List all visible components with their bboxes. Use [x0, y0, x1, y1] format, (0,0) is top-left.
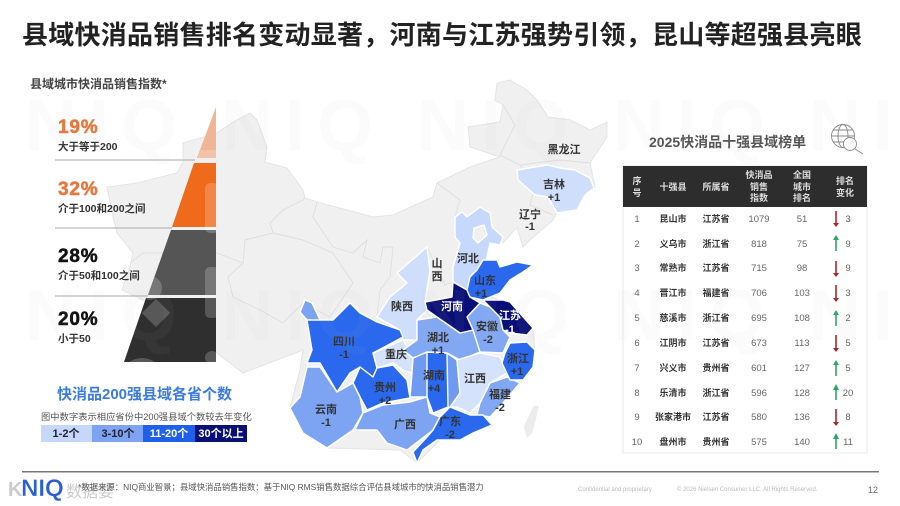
table rows: 4 — [634, 288, 640, 299]
map: province labels: -2 — [445, 429, 455, 441]
legend swatches: 30个以上 — [198, 427, 244, 440]
legend swatches: 3-10个 — [101, 427, 135, 440]
tier 20%: 小于50 — [58, 332, 91, 345]
tier 20%: 20% — [58, 309, 98, 330]
table rows: 1 — [634, 214, 640, 225]
table rows: 140 — [794, 437, 810, 448]
legend swatches — [41, 425, 247, 442]
table rows: 江苏省 — [702, 262, 730, 273]
table rows: 8 — [634, 388, 640, 399]
map: province labels: -1 — [321, 417, 331, 429]
map: province labels: +2 — [379, 395, 391, 407]
table rows: 3 — [845, 214, 851, 225]
map: province labels: 云南 — [315, 403, 337, 416]
table rows — [632, 213, 853, 448]
table header: 号 — [632, 188, 642, 198]
table rows: 福建省 — [702, 287, 730, 298]
table rows: 浙江省 — [702, 312, 730, 323]
map: province labels: 湖南 — [423, 368, 445, 382]
table rows: 11 — [843, 437, 853, 448]
table header: 排名 — [793, 192, 811, 203]
table rows: 113 — [794, 338, 810, 349]
table rows: 98 — [797, 263, 807, 274]
map: internal borders — [130, 105, 590, 323]
legend swatches: 1-2个 — [53, 427, 79, 440]
map: province labels: 江苏 — [499, 308, 521, 322]
watermark — [25, 86, 900, 356]
map of China — [107, 80, 607, 463]
table rows: 7 — [634, 363, 640, 374]
map: province labels: 河南 — [441, 300, 463, 313]
legend: province counts — [41, 385, 252, 442]
footer logo: 数据要 — [66, 483, 114, 501]
map: province labels: +1 — [475, 288, 487, 300]
map: province labels: -1 — [339, 349, 349, 361]
table rows: 9 — [845, 239, 851, 250]
page number: 12 — [868, 485, 878, 495]
map: province labels: 重庆 — [385, 347, 407, 361]
table rows: 2 — [845, 313, 851, 324]
map: province labels: -1 — [505, 324, 515, 336]
table rows: 江苏省 — [702, 213, 730, 224]
table header: 销售 — [750, 181, 768, 192]
subheading: 县域城市快消品销售指数* — [30, 76, 167, 91]
map: province labels: 四川 — [333, 336, 355, 348]
map: province labels: +4 — [428, 383, 441, 395]
table header: 全国 — [793, 169, 811, 180]
table rows: 580 — [751, 412, 767, 423]
table rows: 3 — [845, 288, 851, 299]
table rows: 596 — [751, 388, 767, 399]
table rows: 715 — [751, 263, 767, 274]
legend swatches: 11-20个 — [150, 427, 188, 440]
tier dividers — [55, 160, 195, 296]
table rows: 9 — [845, 263, 851, 274]
panel: top ten table — [623, 166, 867, 453]
table rows: 673 — [751, 338, 767, 349]
map: province labels: 广西 — [394, 417, 416, 431]
table rows: 张家港市 — [655, 411, 691, 422]
map: province labels: 贵州 — [374, 380, 396, 394]
pyramid segments — [124, 107, 216, 362]
tier 19% — [58, 117, 118, 153]
tier 28%: 28% — [58, 246, 98, 267]
footer logo: NIQ — [21, 475, 64, 502]
table rows: 10 — [632, 437, 642, 448]
map: province labels: 湖北 — [427, 330, 449, 344]
table rows: 9 — [634, 412, 640, 423]
table rows: 常熟市 — [659, 262, 687, 273]
table header: 序 — [632, 175, 642, 186]
table rows: 盘州市 — [659, 436, 687, 447]
footer legal: Confidential and proprietary — [578, 487, 652, 493]
map: province labels: +1 — [511, 366, 523, 378]
table rows: 136 — [794, 412, 810, 423]
table rows: 128 — [794, 388, 810, 399]
table header: 指数 — [750, 192, 768, 203]
table rows: 20 — [843, 388, 853, 399]
table rows: 江苏省 — [702, 337, 730, 348]
map: province labels: 福建 — [489, 387, 511, 401]
table header: 变化 — [836, 187, 854, 198]
tier 19%: 大于等于200 — [58, 140, 118, 153]
table rows: 706 — [751, 288, 767, 299]
map: province labels: 陕西 — [391, 299, 413, 313]
table header: 快消品 — [745, 169, 773, 180]
table rows: 贵州省 — [702, 436, 730, 447]
rank change arrows — [833, 211, 839, 449]
table rows: 1079 — [748, 214, 770, 225]
tier 19%: 19% — [58, 117, 98, 138]
table header — [623, 166, 867, 207]
tier 32%: 介于100和200之间 — [58, 202, 146, 215]
table rows: 51 — [797, 214, 807, 225]
map: province labels: 广东 — [439, 414, 461, 428]
tier 28%: 介于50和100之间 — [58, 269, 140, 282]
table rows: 3 — [634, 263, 640, 274]
map: province labels: 西 — [432, 270, 442, 283]
table rows: 601 — [751, 363, 767, 374]
table rows: 695 — [751, 313, 767, 324]
map: province labels: 山东 — [474, 273, 496, 287]
table rows: 浙江省 — [702, 387, 730, 398]
table header: 排名 — [836, 175, 854, 186]
map: province labels: 江西 — [464, 372, 486, 385]
table rows: 昆山市 — [659, 213, 687, 224]
table rows: 6 — [634, 338, 640, 349]
footer rule — [22, 471, 879, 472]
table title: 2025快消品十强县域榜单 — [649, 134, 806, 150]
footer logo: K — [8, 479, 23, 501]
map: province labels: -2 — [483, 334, 493, 346]
title: 县域快消品销售排名变动显著，河南与江苏强势引领，昆山等超强县亮眼 — [22, 20, 862, 50]
table rows: 108 — [794, 313, 810, 324]
table rows: 江阴市 — [659, 337, 687, 348]
table rows: 义乌市 — [659, 238, 687, 249]
table rows: 75 — [797, 239, 807, 250]
table header: 十强县 — [659, 181, 687, 192]
map: province labels: 吉林 — [543, 177, 565, 191]
table rows: 乐清市 — [659, 387, 687, 398]
footer source: *数据来源：NIQ商业智景；县域快消品销售指数：基于NIQ RMS销售数据综合评估县域城市的快消品销售潜力 — [78, 482, 484, 492]
table rows: 兴义市 — [659, 362, 687, 373]
map: province labels: 辽宁 — [519, 207, 541, 221]
table rows: 江苏省 — [702, 411, 730, 422]
footer legal — [578, 486, 818, 493]
map: province labels: 黑龙江 — [548, 142, 580, 156]
map: province labels — [315, 142, 580, 441]
table rows: 2 — [634, 239, 640, 250]
map: grey base — [107, 80, 607, 463]
table rows: 5 — [634, 313, 640, 324]
footer legal: © 2026 Nielsen Consumer LLC. All Rights Reserved. — [677, 486, 818, 493]
table rows: 103 — [794, 288, 810, 299]
table rows: 5 — [845, 363, 851, 374]
map: coloured provinces — [290, 165, 594, 463]
table rows: 贵州省 — [702, 362, 730, 373]
map: province labels: 河北 — [457, 252, 479, 265]
map: province labels: 山 — [432, 256, 442, 270]
table rows: 8 — [845, 412, 851, 423]
table header: 所属省 — [702, 181, 730, 192]
table rows: 慈溪市 — [659, 312, 687, 323]
tier 20% — [58, 309, 98, 345]
tier 28% — [58, 246, 140, 282]
legend heading: 快消品200强县域各省个数 — [57, 385, 232, 403]
map: province labels: -1 — [525, 221, 535, 233]
legend note: 图中数字表示相应省份中200强县域个数较去年变化 — [41, 411, 252, 422]
table rows: 127 — [794, 363, 810, 374]
table rows: 浙江省 — [702, 238, 730, 249]
table rows: 晋江市 — [659, 287, 687, 298]
map: province labels: +1 — [432, 345, 444, 357]
map: province labels: 浙江 — [507, 351, 529, 365]
table rows: 575 — [751, 437, 767, 448]
footer logo — [8, 475, 114, 502]
table rows: 818 — [751, 239, 767, 250]
tier 32%: 32% — [58, 179, 98, 200]
table header: 城市 — [793, 181, 811, 192]
map: province labels: -2 — [495, 402, 505, 414]
tier 32% — [58, 179, 146, 215]
table rows: 5 — [845, 338, 851, 349]
panel: pyramid of county index — [30, 78, 216, 362]
map: province labels: 安徽 — [476, 319, 498, 333]
map: province labels: +1 — [548, 192, 560, 204]
icon: globe with magnifier — [832, 124, 863, 154]
